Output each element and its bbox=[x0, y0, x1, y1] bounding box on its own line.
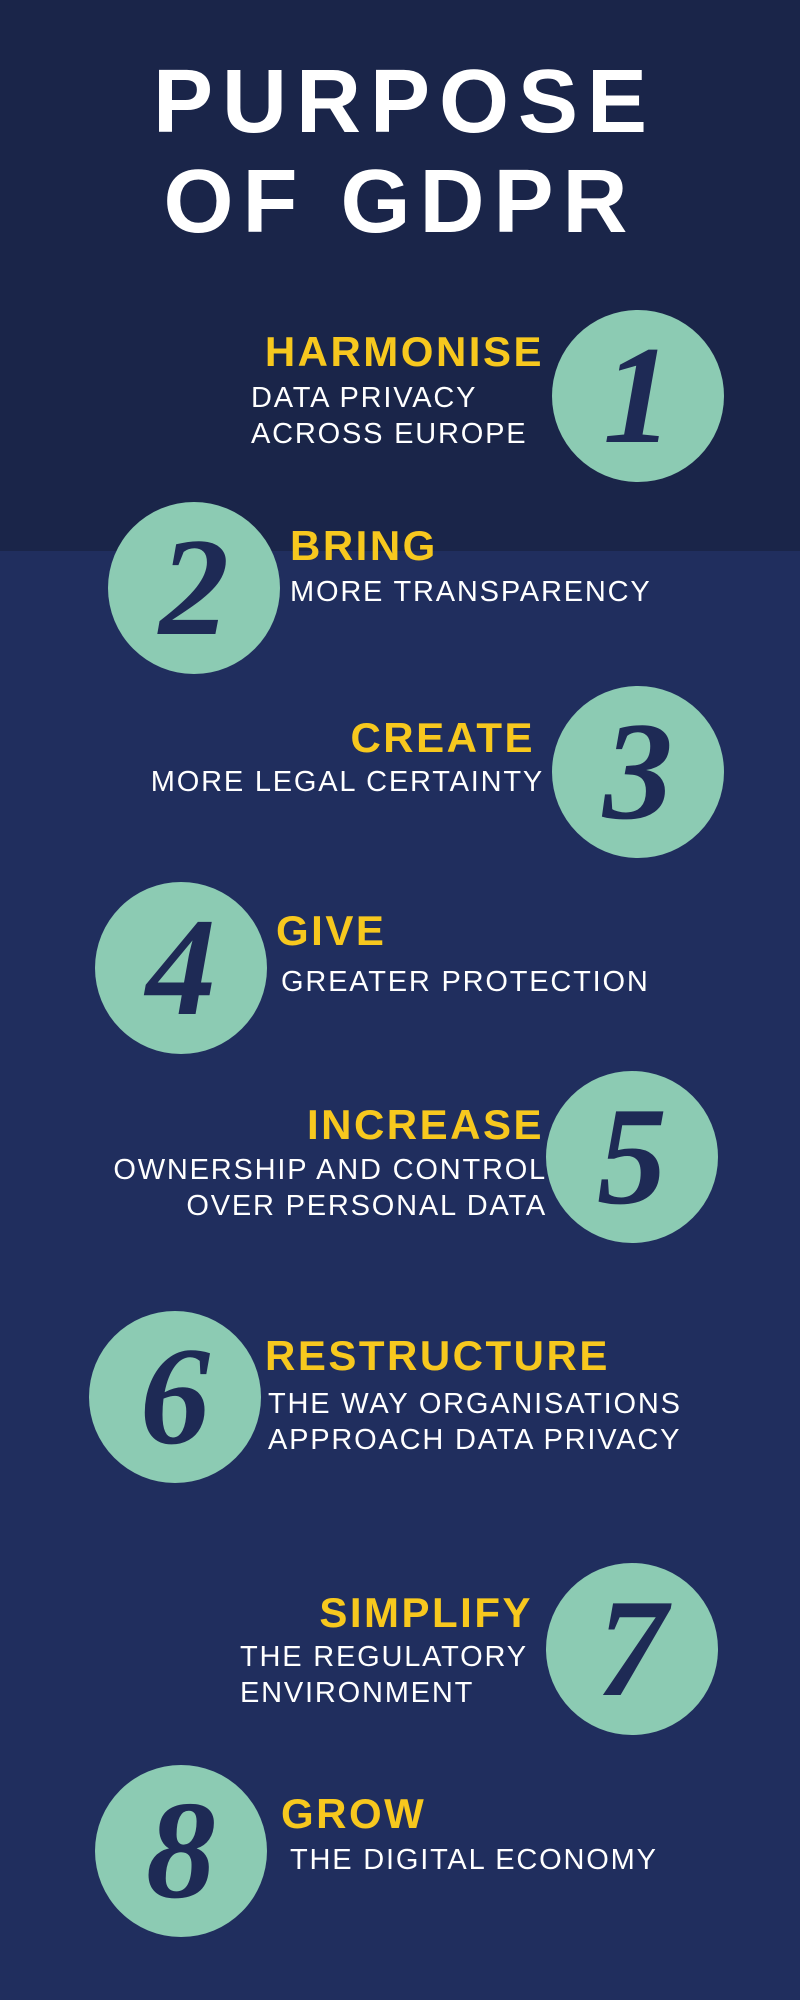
heading 3: CREATE bbox=[350, 714, 535, 761]
text 7: ENVIRONMENT bbox=[240, 1677, 474, 1709]
text 7 bbox=[240, 1641, 528, 1709]
icon: circle 3: 3 bbox=[603, 694, 673, 849]
icon: circle 3 bbox=[552, 686, 724, 858]
text 6: THE WAY ORGANISATIONS bbox=[268, 1388, 682, 1420]
title bbox=[153, 52, 656, 252]
item 7 bbox=[240, 1563, 718, 1735]
text 1 bbox=[251, 382, 527, 450]
text 8: THE DIGITAL ECONOMY bbox=[290, 1844, 658, 1876]
heading 1: HARMONISE bbox=[265, 328, 544, 375]
item 6 bbox=[89, 1311, 682, 1483]
heading 7: SIMPLIFY bbox=[319, 1589, 533, 1636]
text 4: GREATER PROTECTION bbox=[281, 966, 650, 998]
title: OF GDPR bbox=[163, 152, 636, 252]
text 6 bbox=[268, 1388, 682, 1456]
icon: circle 8 bbox=[95, 1765, 267, 1937]
heading 4: GIVE bbox=[276, 907, 386, 954]
heading 8: GROW bbox=[281, 1790, 426, 1837]
text 3: MORE LEGAL CERTAINTY bbox=[151, 766, 544, 798]
item 4 bbox=[95, 882, 650, 1054]
icon: circle 2: 2 bbox=[159, 510, 229, 665]
icon: circle 5: 5 bbox=[597, 1079, 667, 1234]
item 2 bbox=[108, 502, 651, 674]
text 1: ACROSS EUROPE bbox=[251, 418, 527, 450]
icon: circle 1: 1 bbox=[603, 318, 673, 473]
text 2: MORE TRANSPARENCY bbox=[290, 576, 651, 608]
icon: circle 4 bbox=[95, 882, 267, 1054]
text 5: OVER PERSONAL DATA bbox=[186, 1190, 547, 1222]
icon: circle 7 bbox=[546, 1563, 718, 1735]
text 1: DATA PRIVACY bbox=[251, 382, 477, 414]
icon: circle 6: 6 bbox=[140, 1319, 210, 1474]
icon: circle 7: 7 bbox=[597, 1571, 667, 1726]
item 8 bbox=[95, 1765, 658, 1937]
icon: circle 2 bbox=[108, 502, 280, 674]
item 1 bbox=[251, 310, 724, 482]
text 5: OWNERSHIP AND CONTROL bbox=[113, 1154, 547, 1186]
text 5 bbox=[113, 1154, 547, 1222]
icon: circle 1 bbox=[552, 310, 724, 482]
icon: circle 8: 8 bbox=[146, 1773, 216, 1928]
item 5 bbox=[113, 1071, 718, 1243]
icon: circle 4: 4 bbox=[146, 890, 216, 1045]
heading 2: BRING bbox=[290, 522, 438, 569]
icon: circle 5 bbox=[546, 1071, 718, 1243]
icon: circle 6 bbox=[89, 1311, 261, 1483]
text 6: APPROACH DATA PRIVACY bbox=[268, 1424, 681, 1456]
item 3 bbox=[151, 686, 724, 858]
title: PURPOSE bbox=[153, 52, 656, 152]
heading 6: RESTRUCTURE bbox=[265, 1332, 610, 1379]
heading 5: INCREASE bbox=[307, 1101, 544, 1148]
text 7: THE REGULATORY bbox=[240, 1641, 528, 1673]
